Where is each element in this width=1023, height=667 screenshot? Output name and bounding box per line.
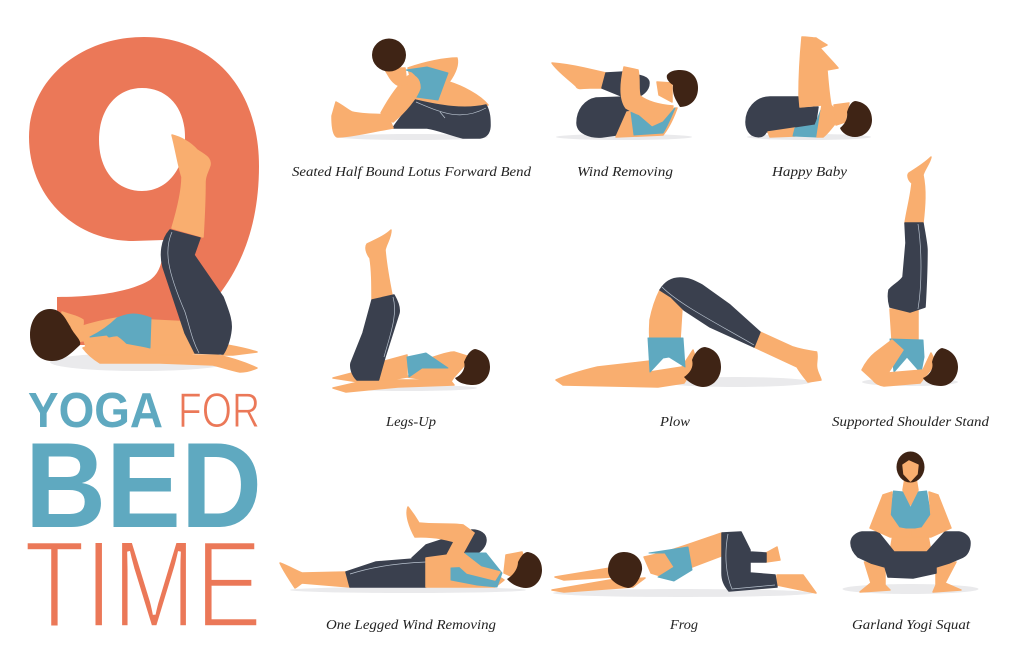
torso (768, 128, 795, 137)
shadow (862, 378, 958, 386)
big number 9 (29, 37, 259, 345)
figure: hero legs-up pose (30, 135, 257, 372)
torso (616, 108, 677, 137)
hair (896, 452, 924, 482)
face (903, 461, 918, 481)
label: legs-up: Legs-Up (385, 414, 436, 429)
top (451, 553, 502, 587)
lower thigh (577, 97, 634, 137)
top (631, 108, 675, 135)
belly (890, 528, 931, 552)
label: frog: Frog (669, 617, 698, 632)
torso (890, 309, 918, 340)
neck and shoulders (903, 478, 918, 505)
shadow (842, 584, 978, 594)
torso (408, 58, 488, 109)
raised calf (407, 507, 474, 545)
hero shadow (50, 353, 230, 371)
extended legs and feet (332, 102, 393, 137)
shadow (337, 385, 477, 391)
top (793, 107, 822, 137)
hair (667, 70, 698, 107)
pose: happy baby (746, 37, 872, 140)
hero face (62, 312, 88, 342)
FOR: FOR (178, 384, 260, 438)
torso (426, 553, 504, 587)
face (384, 68, 407, 87)
hair (608, 552, 642, 588)
top (407, 353, 448, 377)
shadow (553, 589, 813, 597)
pose: seated half bound lotus forward bend (332, 38, 490, 140)
YOGA: YOGA (28, 384, 163, 438)
top (649, 547, 692, 581)
leggings (351, 295, 399, 380)
top (890, 491, 931, 528)
bent thigh (412, 530, 486, 558)
label: wind removing: Wind Removing (577, 164, 673, 179)
legs and foot (905, 157, 931, 223)
top (890, 339, 924, 373)
arms (333, 373, 454, 392)
hero sports top (90, 314, 151, 348)
label: seated half bound lotus forward bend: Seated Half Bound Lotus Forward Bend (292, 164, 531, 179)
pose: supported shoulder stand (862, 157, 958, 386)
label: happy baby: Happy Baby (771, 164, 847, 179)
pose: one legged wind removing (280, 507, 542, 593)
hero far hand (222, 345, 257, 355)
hero hands and arms (83, 337, 257, 372)
upper thigh (602, 72, 649, 97)
leggings (346, 558, 426, 587)
pose: legs-up (333, 230, 490, 392)
hero leggings (161, 230, 231, 354)
arm (447, 525, 500, 580)
pose: wind removing (552, 63, 698, 140)
extended leg and foot (280, 563, 350, 588)
label: supported shoulder stand: Supported Shoulder Stand (832, 414, 989, 429)
shadow (747, 134, 871, 140)
bent legs (746, 97, 818, 137)
calf and foot (366, 230, 392, 300)
lower leg (777, 575, 816, 593)
shadow (661, 377, 811, 387)
TIME: TIME (24, 516, 262, 654)
back foot (766, 547, 780, 562)
arms with joined hands (870, 492, 951, 537)
lower leg and foot (754, 332, 821, 382)
hair (684, 347, 721, 387)
arm (621, 67, 673, 118)
hair (372, 38, 406, 72)
torso (644, 533, 729, 580)
raised calf (552, 63, 606, 88)
title: YOGA FOR BED TIME (24, 384, 262, 654)
leggings (660, 278, 760, 347)
arm (381, 76, 420, 122)
hair (923, 348, 958, 386)
hero calf and foot (172, 135, 210, 237)
feet (860, 562, 961, 592)
top (406, 67, 448, 100)
leggings (888, 223, 927, 312)
pose: garland yogi squat (842, 452, 978, 594)
torso (650, 290, 682, 340)
chest (407, 352, 470, 383)
shadow (556, 134, 692, 140)
top (648, 338, 685, 372)
hair (507, 552, 542, 588)
arms (552, 568, 645, 592)
leggings (393, 100, 490, 138)
hair (840, 101, 872, 137)
face (657, 82, 672, 102)
label: plow: Plow (659, 414, 690, 429)
leggings (722, 532, 777, 591)
torso (372, 355, 407, 383)
hero hair (30, 309, 80, 361)
pose: plow (556, 278, 821, 387)
raised thighs and arms (799, 37, 840, 137)
shadow (338, 134, 488, 140)
arms (862, 340, 936, 386)
pose: frog (552, 532, 816, 597)
BED: BED (25, 417, 262, 553)
face (504, 552, 525, 577)
face (834, 103, 849, 125)
shadow (290, 587, 526, 593)
label: garland yogi squat: Garland Yogi Squat (852, 617, 971, 632)
hair (455, 349, 490, 385)
hero torso (80, 318, 197, 357)
label: one legged wind removing: One Legged Wind Removing (326, 617, 496, 632)
arms (556, 350, 697, 387)
leggings (851, 532, 970, 578)
